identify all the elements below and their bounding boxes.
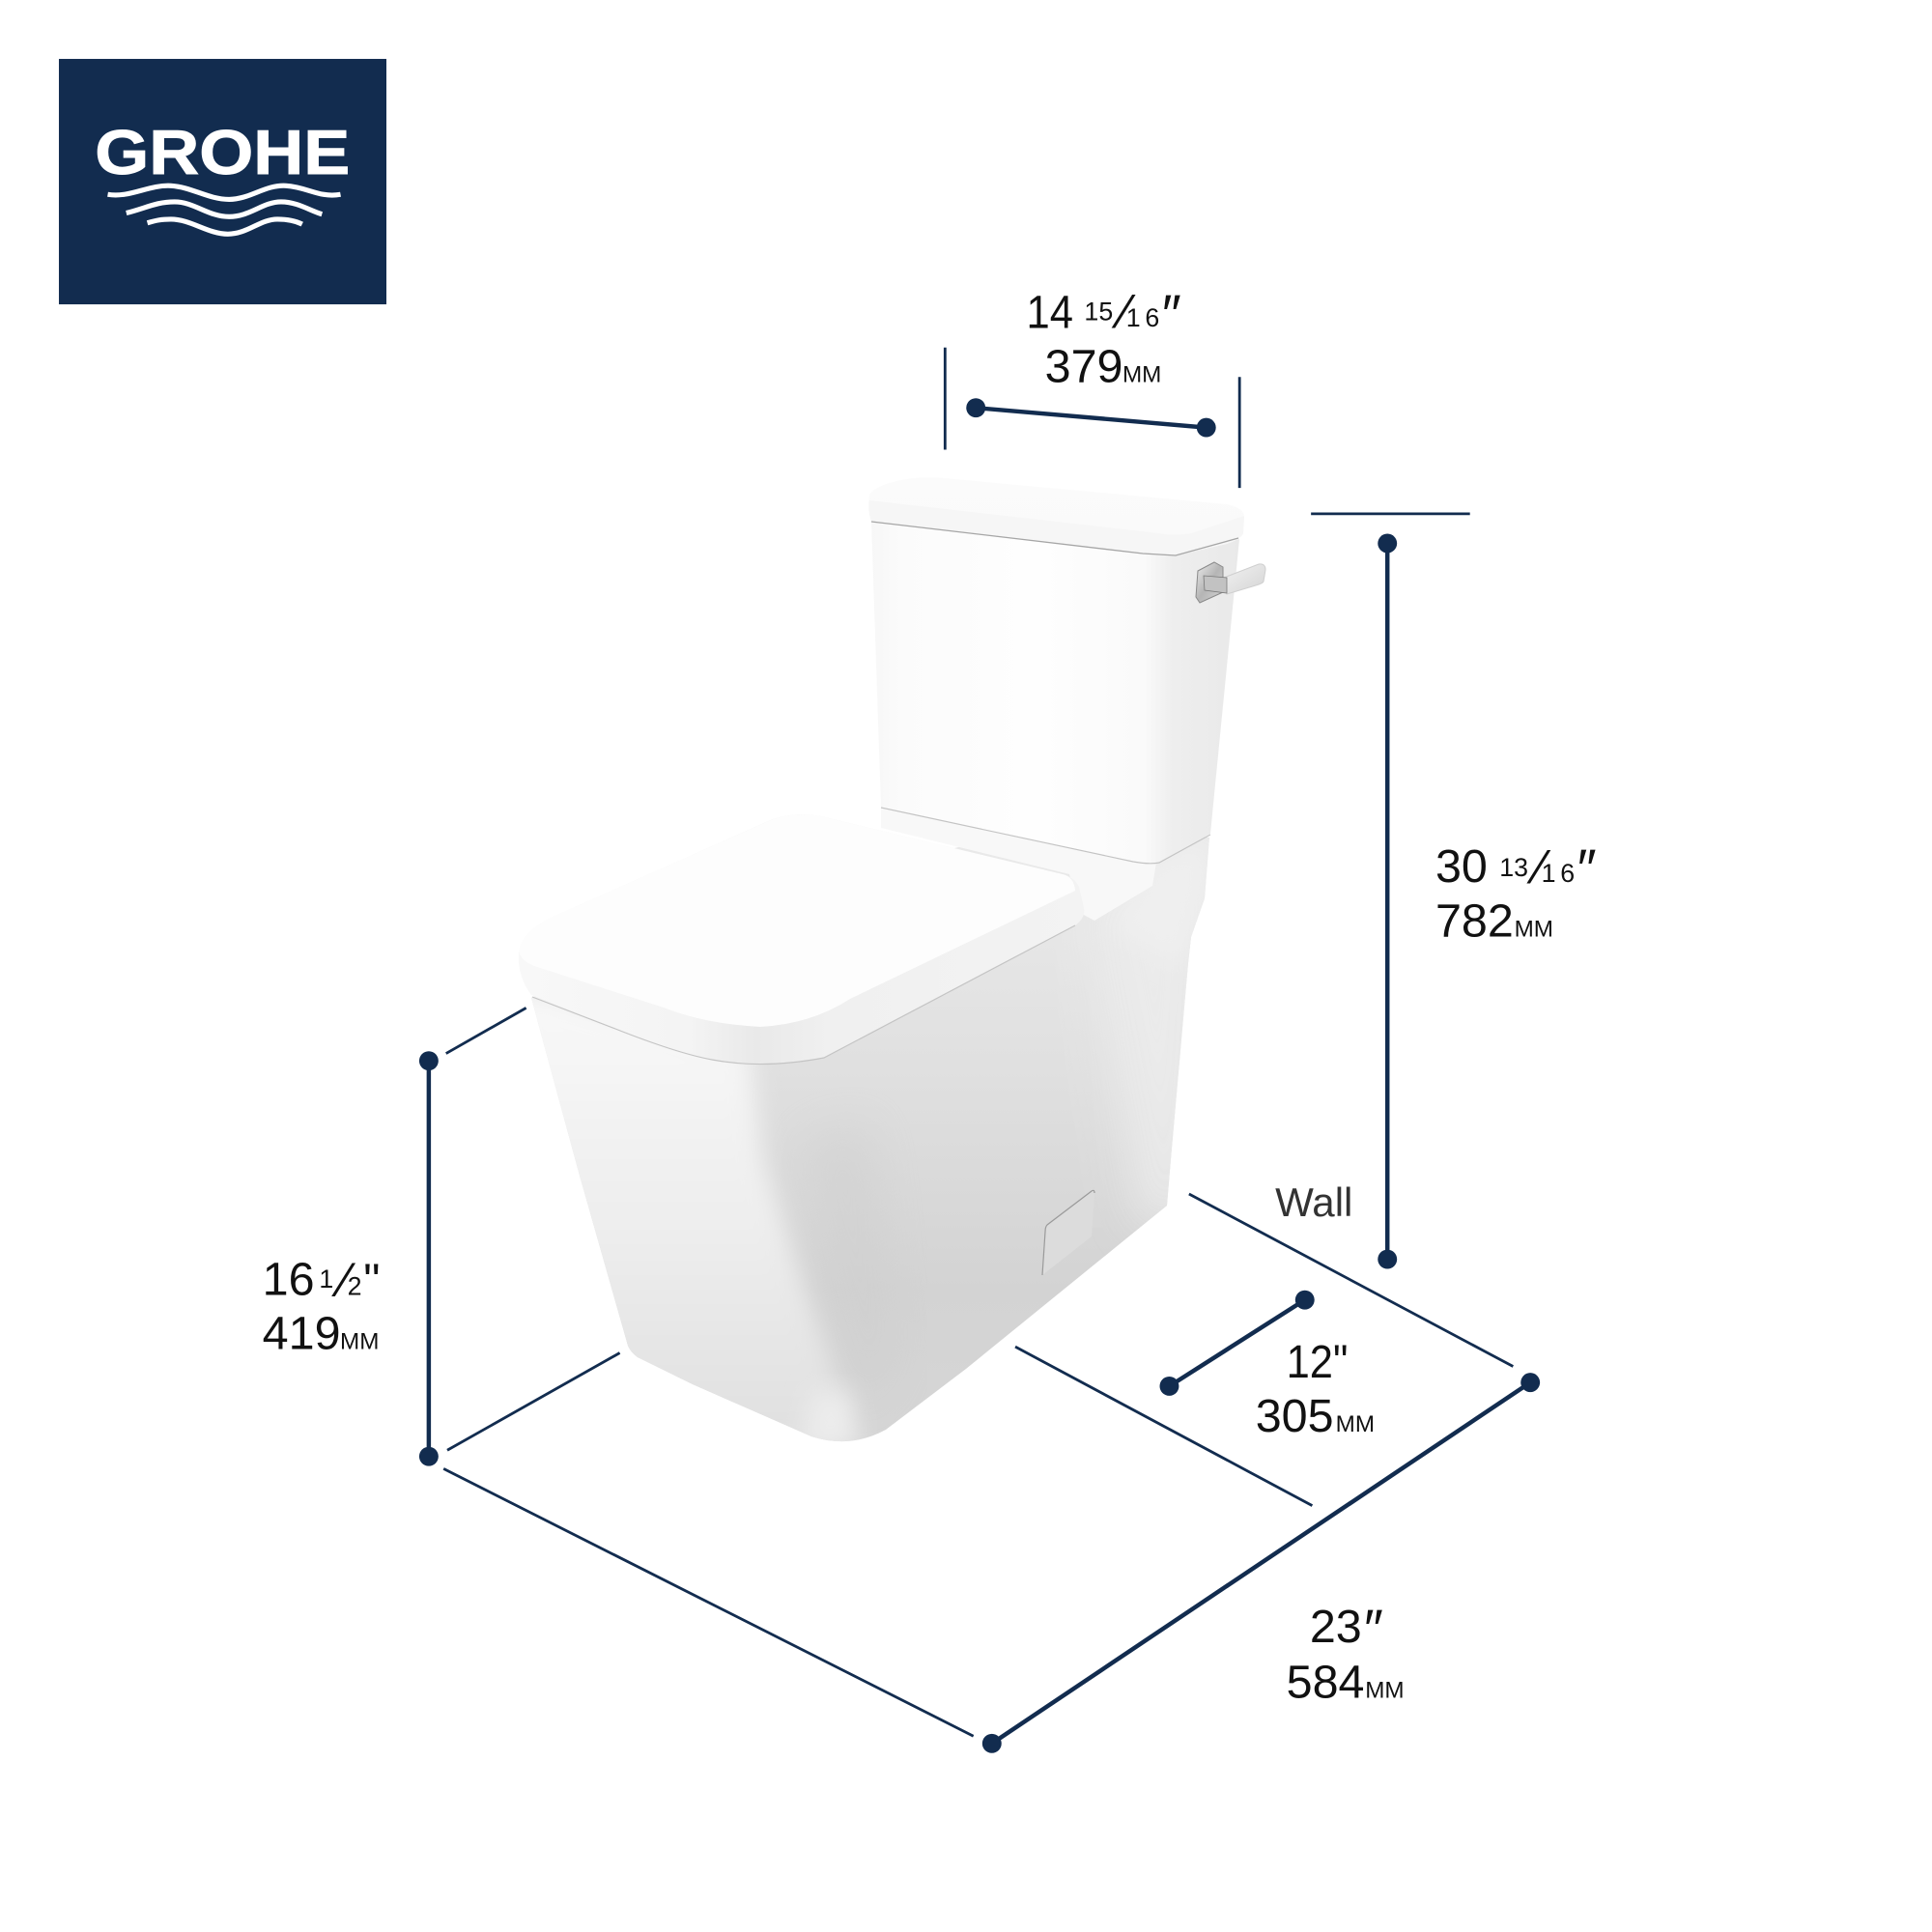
height arrow <box>1378 534 1397 1269</box>
depth label <box>1287 1598 1405 1709</box>
height label: MM <box>1515 916 1553 942</box>
seat height label <box>263 1253 380 1360</box>
tank width label: ″ <box>1159 283 1180 344</box>
seat height label: MM <box>340 1329 379 1355</box>
seat height label: 2 <box>348 1272 362 1301</box>
depth label: 23 <box>1310 1601 1362 1653</box>
depth label: 584 <box>1287 1657 1364 1709</box>
access cover edge <box>1042 1190 1094 1275</box>
tank <box>871 522 1239 864</box>
depth label: ″ <box>1361 1598 1382 1659</box>
seat deck <box>881 809 1156 921</box>
tank base seam <box>881 808 1210 864</box>
seat height extension lines <box>446 1008 620 1450</box>
tank width label: MM <box>1122 361 1161 387</box>
access cover <box>1042 1190 1094 1275</box>
height label: ″ <box>1575 838 1596 898</box>
seat height label: " <box>363 1255 380 1307</box>
dimension: seat height <box>263 1008 620 1466</box>
logo: GROHE: GROHE <box>95 117 350 187</box>
rough-in label: MM <box>1336 1411 1375 1437</box>
lid front face <box>868 500 1244 555</box>
rough-in label: 12" <box>1287 1336 1348 1388</box>
wall label: Wall <box>1275 1179 1352 1225</box>
rough-in label: 305 <box>1256 1390 1334 1442</box>
seat height label: 419 <box>263 1308 341 1360</box>
height extension line <box>1311 513 1470 515</box>
seat height arrow <box>419 1051 439 1466</box>
flush handle <box>1196 562 1265 603</box>
depth arrow <box>982 1373 1540 1753</box>
height label: 30 <box>1435 840 1488 893</box>
corner shadow <box>802 1121 898 1420</box>
seat seam <box>532 925 1075 1065</box>
depth front reference line <box>443 1468 974 1736</box>
icon: logo water waves <box>108 185 341 234</box>
dimension: rough-in from wall <box>1015 1179 1513 1506</box>
toilet seat edge <box>519 814 1084 1065</box>
dimension: overall height <box>1311 514 1596 1269</box>
tank width label <box>1026 283 1180 392</box>
toilet seat lid <box>519 814 1075 1027</box>
height label: 13 <box>1499 853 1528 882</box>
tank width label: 379 <box>1045 340 1122 392</box>
seat height label: ⁄ <box>330 1253 355 1307</box>
seat height label: 1 <box>319 1264 333 1293</box>
height label: ⁄ <box>1526 840 1551 895</box>
toilet illustration <box>512 477 1265 1459</box>
wall line and rear reference line <box>1015 1194 1513 1506</box>
body left face <box>531 997 835 1428</box>
lid seam <box>871 522 1238 555</box>
tank width label: ⁄ <box>1111 284 1136 338</box>
dimension: tank width <box>945 283 1239 488</box>
tank lid <box>868 477 1244 555</box>
logo: GROHE <box>59 59 386 304</box>
body upper right highlight <box>1123 1001 1182 1216</box>
tank width label: 16 <box>1126 303 1159 332</box>
infographic canvas <box>58 58 1596 1753</box>
tank width extension lines <box>945 348 1239 488</box>
dimension: overall depth <box>443 1373 1540 1753</box>
tank width label: 15 <box>1084 298 1113 327</box>
height label <box>1435 838 1596 947</box>
height label: 16 <box>1542 859 1575 888</box>
tank neck side <box>1111 838 1209 966</box>
rough-in label <box>1256 1336 1375 1442</box>
height label: 782 <box>1435 895 1514 947</box>
body front corner highlight <box>811 1393 861 1441</box>
rough-in arrow <box>1160 1291 1315 1396</box>
tank width arrow <box>966 398 1216 438</box>
tank width label: 14 <box>1026 286 1073 338</box>
seat height label: 16 <box>263 1254 315 1306</box>
toilet body <box>531 837 1209 1441</box>
depth label: MM <box>1365 1678 1405 1704</box>
